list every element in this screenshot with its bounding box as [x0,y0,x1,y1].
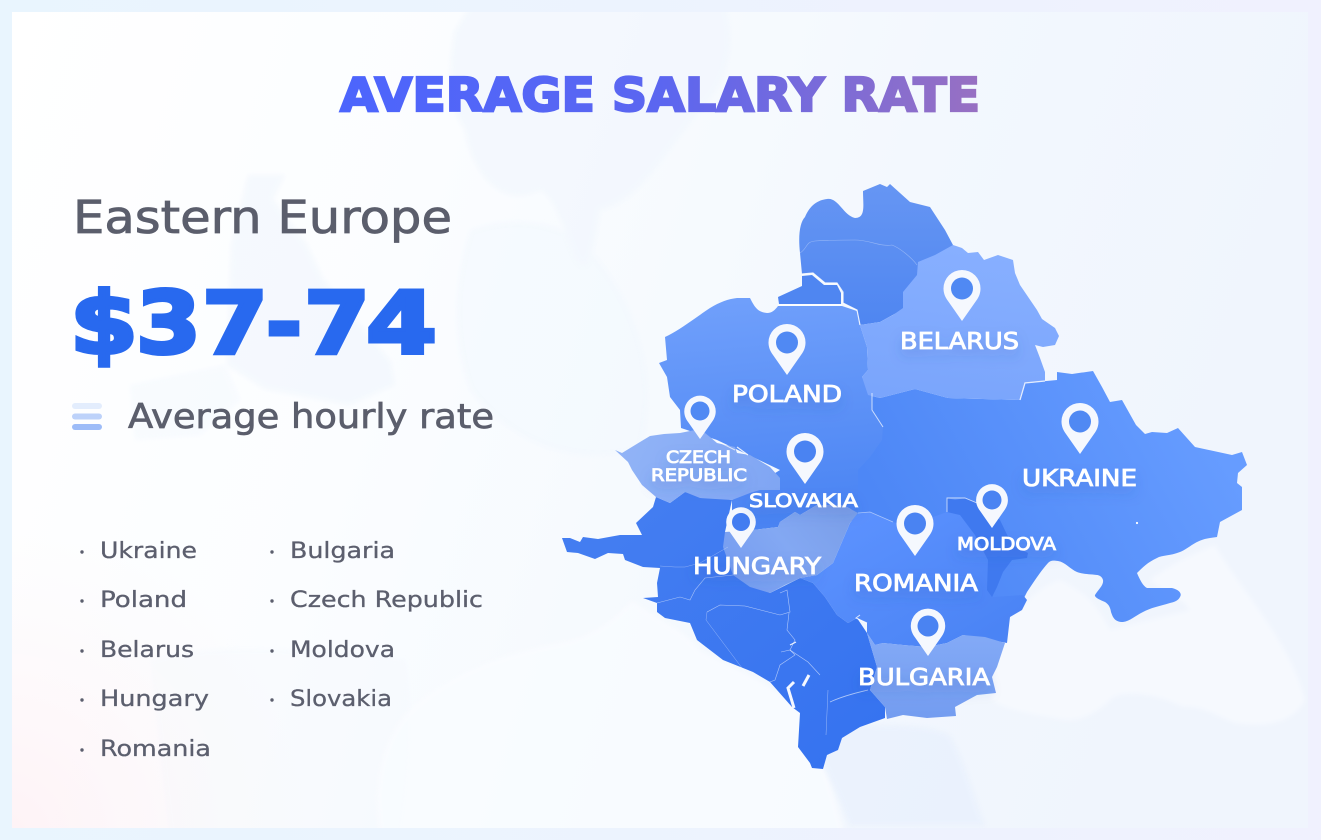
label: Hungary: HUNGARY [693,554,822,580]
label: Belarus: BELARUS [900,329,1019,355]
faint light land at the bottom [376,600,846,840]
country list: Belarus [100,638,194,663]
salary range: 4 [366,274,437,374]
icon: rate bars [72,403,102,430]
label: Poland: POLAND [732,382,842,408]
region heading: Eastern Europe [73,191,452,244]
faint eastern land blob [992,545,1305,725]
country: Poland and Slovakia [659,298,883,530]
label: Czech Republic: CZECH [666,448,731,467]
pin: Moldova [976,484,1008,528]
country list: Moldova [290,638,395,663]
country: Belarus [860,245,1059,400]
country: Baltic states [799,184,960,325]
faint sea tint [809,720,985,826]
country: Hungary [723,505,858,593]
pin: Romania [896,505,934,556]
label: Czech Republic: REPUBLIC [651,466,747,485]
country list: Slovakia [290,687,392,712]
country list: Bulgaria [290,539,395,564]
label: Moldova: MOLDOVA [957,535,1056,555]
pin: Slovakia [786,433,824,484]
salary range: 7 [202,274,268,374]
country list: Ukraine [100,539,197,564]
country: Ukraine [850,371,1247,622]
pin: Bulgaria [911,609,945,656]
label: Slovakia: SLOVAKIA [749,491,858,512]
label: Bulgaria: BULGARIA [858,665,990,691]
border lines [657,240,1045,735]
country: Romania [800,512,1027,647]
pin: Ukraine [1062,403,1098,454]
country: Western Balkans and Austria [562,492,885,769]
island dot [1136,522,1138,524]
salary range: 3 [136,274,201,374]
pin: Belarus [944,270,980,321]
label: Ukraine: UKRAINE [1022,466,1137,492]
pin: Czech Republic [684,396,716,439]
pin: Poland [768,324,806,375]
salary range [70,274,437,374]
country: Moldova [947,498,1028,597]
rate caption: Average hourly rate [128,397,494,437]
faint background map of Europe [130,0,730,840]
left summary panel [70,191,494,437]
map of Eastern Europe [562,184,1247,769]
country: Kaliningrad exclave [778,275,841,304]
country list: Hungary [100,687,209,712]
salary range: 7 [304,274,370,374]
label: Romania: ROMANIA [854,571,978,597]
country list: Romania [100,737,211,762]
country list: Poland [100,588,187,613]
label: Czech Republic [651,448,747,485]
salary range: - [266,274,302,374]
title: AVERAGE SALARY RATE [340,68,980,122]
country: Bulgaria [867,633,1005,719]
country list: Czech Republic [290,588,483,613]
pin: Hungary [726,507,756,548]
country: Czech Republic [615,429,780,503]
country list [80,539,483,762]
salary range: $ [70,274,138,374]
